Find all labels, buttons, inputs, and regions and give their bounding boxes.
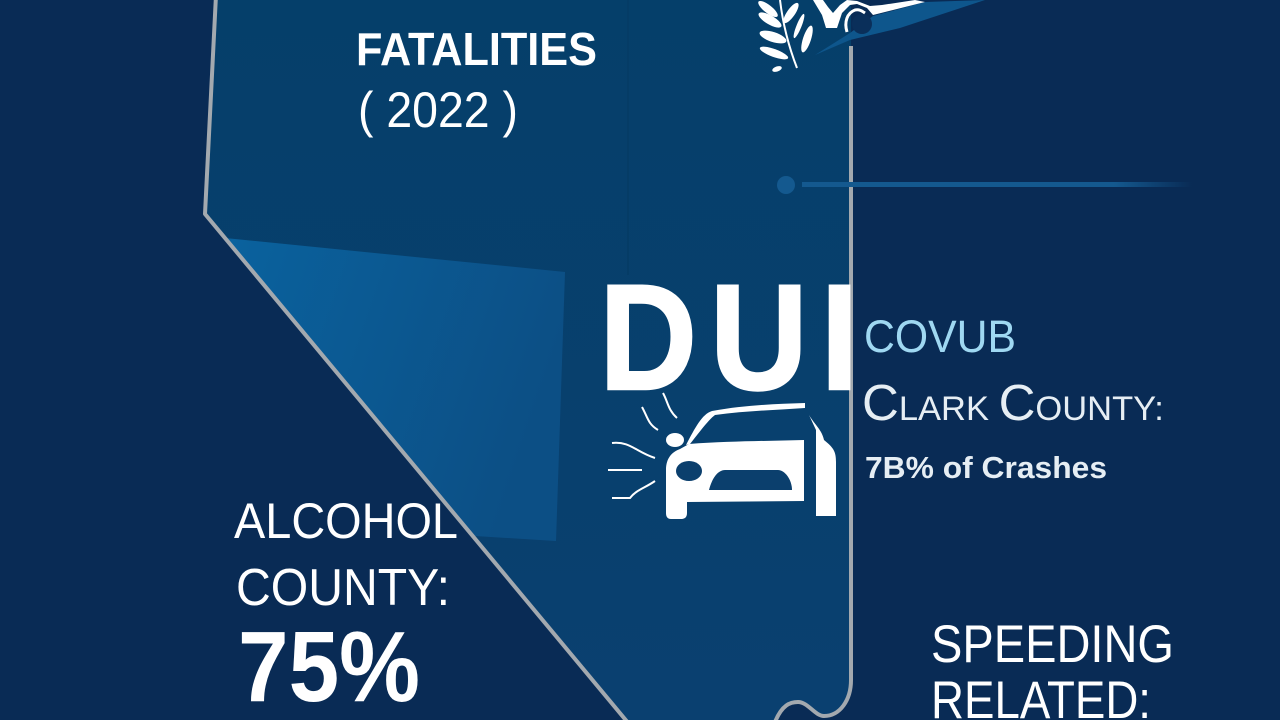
icon: laurel and car emblem (756, 0, 985, 73)
text block: alcohol county (234, 493, 458, 720)
icon: crashed car (608, 393, 836, 519)
heading: fatalities (356, 23, 597, 138)
text block: Clark County: CLARK COUNTY: (862, 374, 1164, 431)
text block: alcohol county: ALCOHOL (234, 493, 458, 549)
map: Nevada state shape (205, 0, 851, 720)
text block: speeding related: SPEEDING (931, 615, 1174, 674)
text block: speeding related (931, 615, 1174, 720)
text block: Clark County: 7B% of Crashes (865, 450, 1107, 485)
text block: alcohol county: COUNTY: (236, 559, 450, 617)
heading: fatalities: FATALITIES (356, 23, 597, 75)
text block: Clark County (862, 311, 1164, 485)
text block: alcohol county: 75% (238, 611, 420, 720)
panel: lighter blue fold (225, 238, 565, 541)
heading: fatalities: ( 2022 ) (358, 82, 518, 138)
callout line (777, 176, 1192, 194)
heading: DUI: DUI (599, 254, 858, 422)
text block: Clark County: COVUB (864, 311, 1016, 362)
